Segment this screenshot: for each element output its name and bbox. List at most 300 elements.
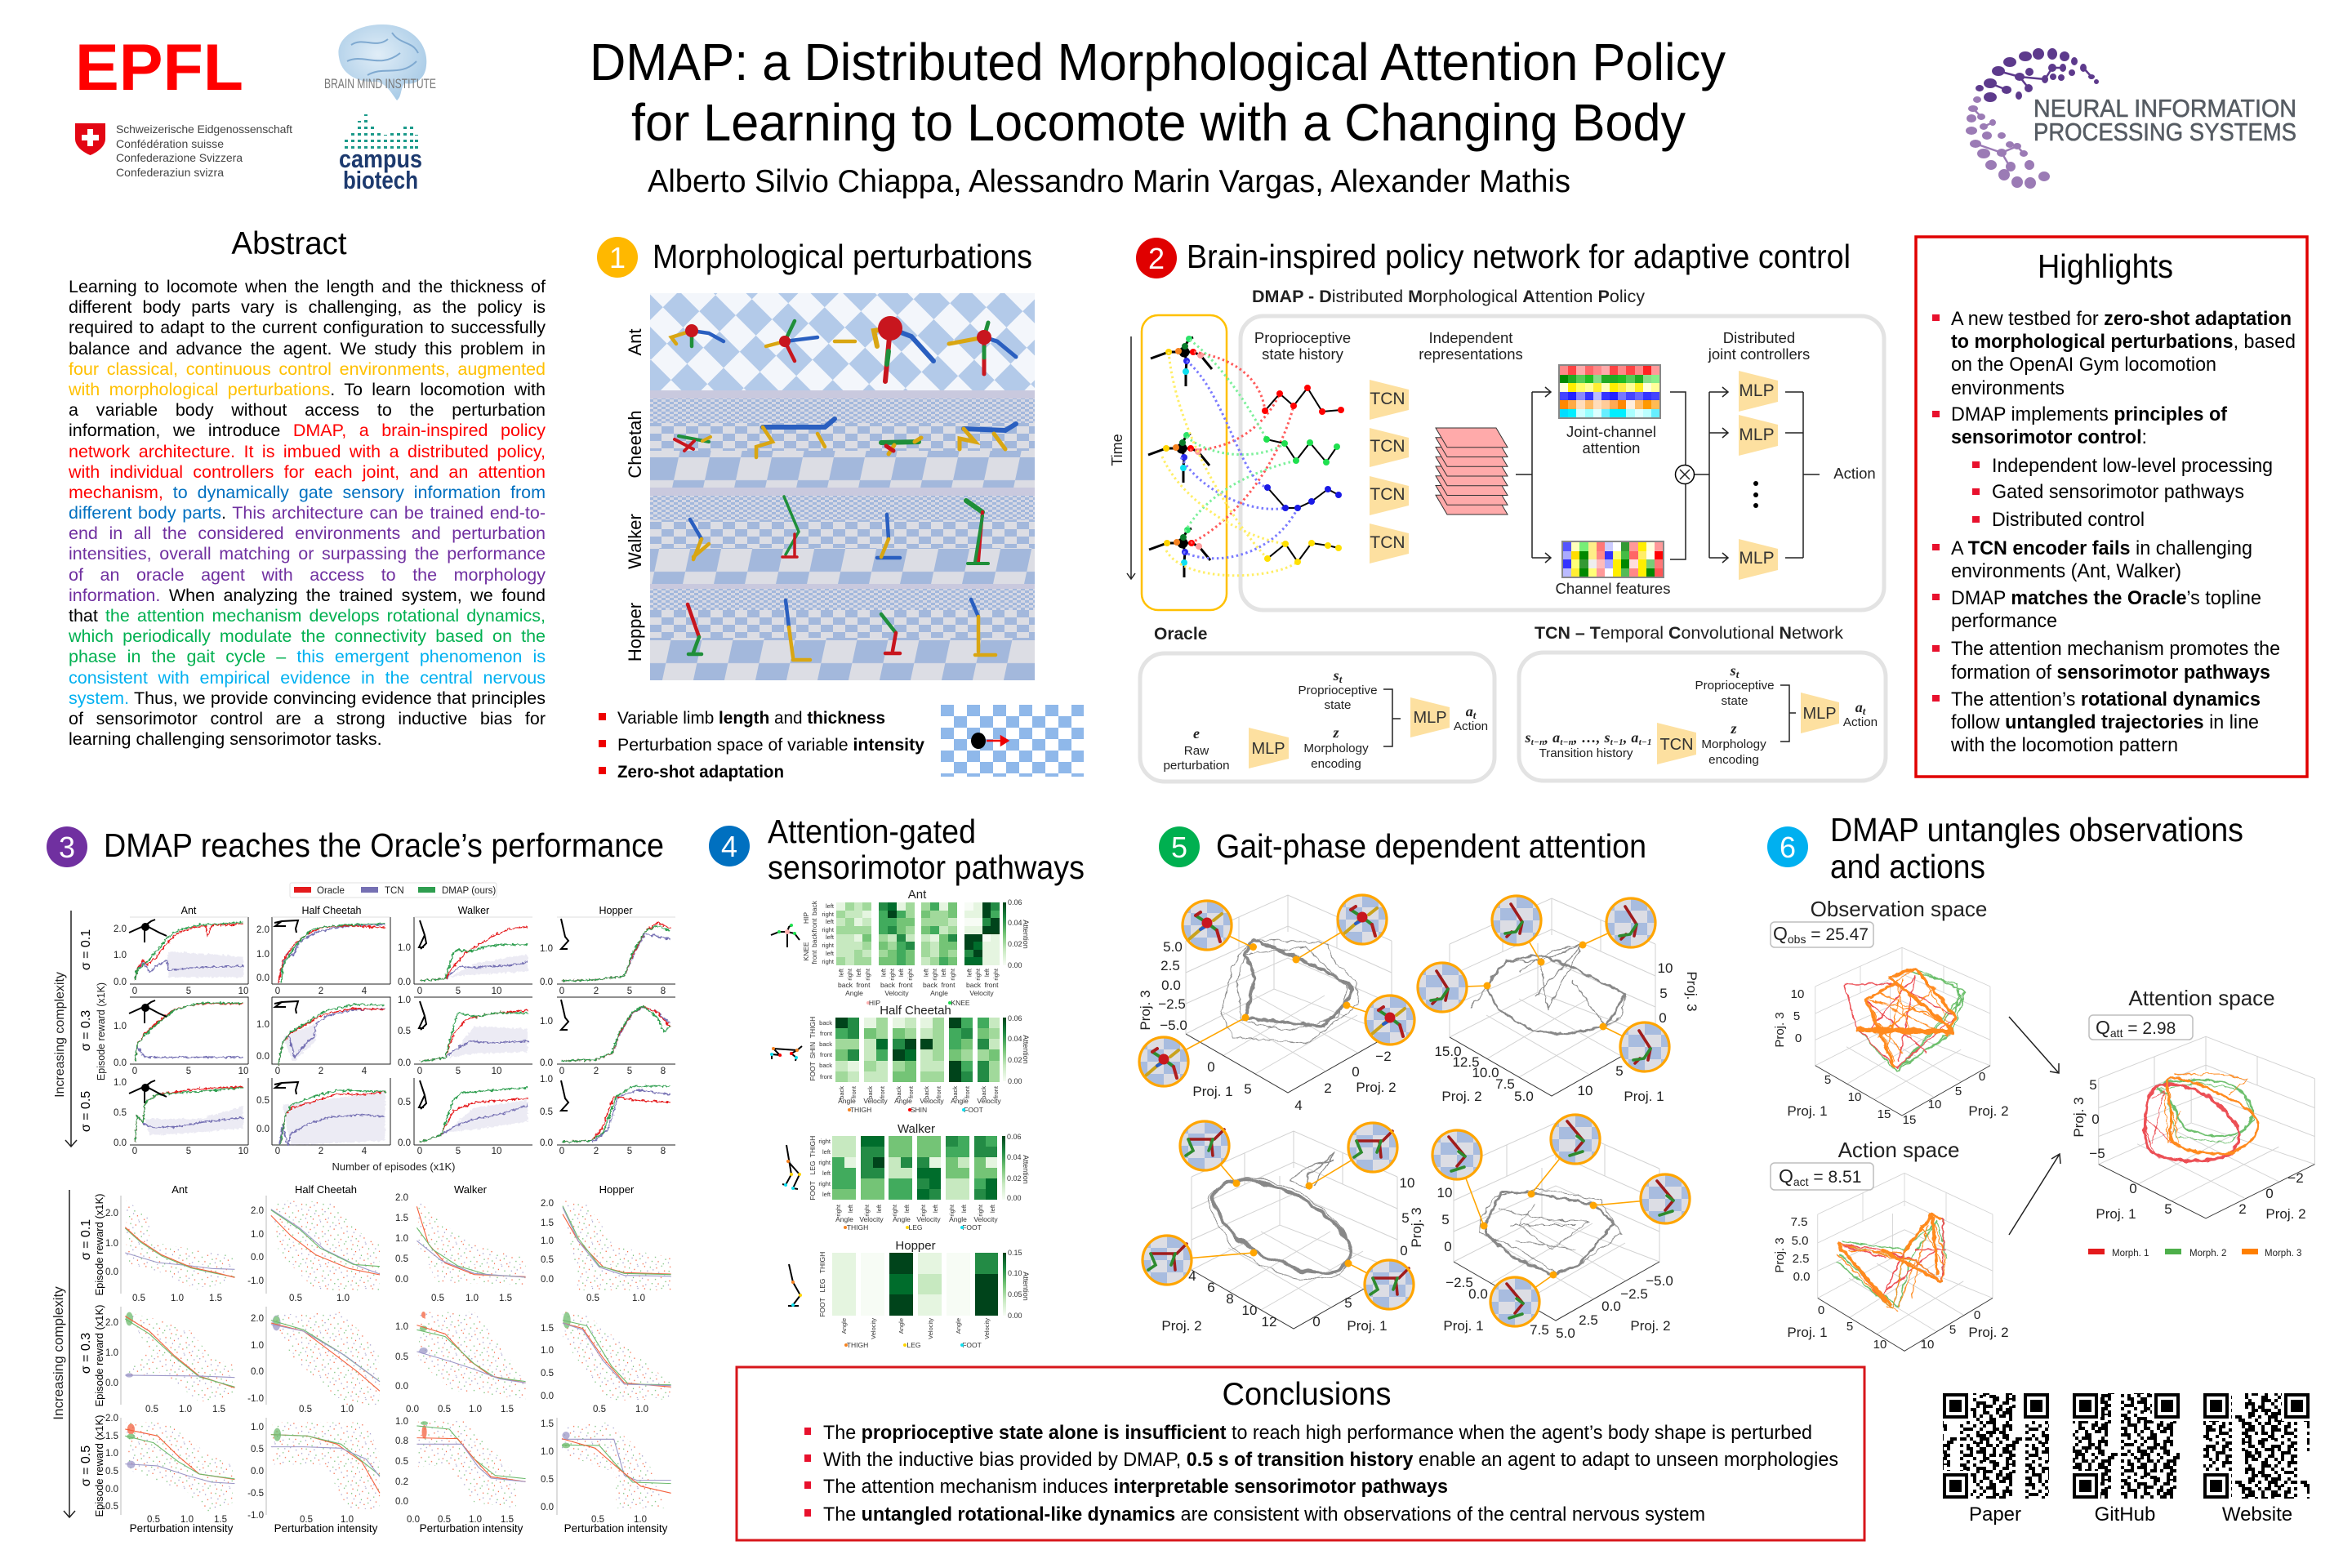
- x and y tick labels: 0: [275, 1067, 280, 1076]
- scatter tick labels: 0.5: [105, 1467, 118, 1477]
- MLP joint controllers: [1739, 371, 1778, 580]
- Oracle box: [1140, 653, 1494, 782]
- Q att callout: = 2.98: [2123, 1019, 2176, 1038]
- Oracle box: Action: [1454, 719, 1488, 733]
- environment titles: Half Cheetah: [302, 905, 362, 916]
- Oracle box: Raw: [1184, 744, 1209, 758]
- scatter tick labels: 0.5: [289, 1294, 302, 1303]
- panel: 5 gait-phase dependent attention: [1138, 826, 1699, 1341]
- x and y tick labels: 1.0: [540, 944, 553, 954]
- title: DMAP: a Distributed Morphological Attention Policy: [590, 33, 1726, 91]
- plot: hopper gait-phase trajectory: 10: [1437, 1185, 1452, 1200]
- Half Cheetah attention heatmap: SHIN: [808, 1042, 817, 1058]
- learning curves chart: [53, 905, 675, 1173]
- x and y tick labels: 5: [186, 1147, 191, 1156]
- Ant attention heatmap: Angle: [845, 989, 863, 997]
- x and y tick labels: 1.0: [114, 1078, 127, 1088]
- x and y tick labels: 2: [318, 1067, 323, 1076]
- logo: Campus Biotech: [339, 114, 422, 194]
- scatter sigma labels: [79, 1219, 93, 1486]
- Half Cheetah attention heatmap: back: [819, 1040, 832, 1048]
- action space plot: 5: [1846, 1320, 1853, 1334]
- Half Cheetah attention heatmap: SHIN: [911, 1106, 927, 1114]
- conclusions text: With the inductive bias provided by DMAP, 0.5 s of transition history enable an agent to adapt to unseen morphologies: [823, 1449, 1838, 1471]
- arrow: action to attention: [2009, 1154, 2060, 1235]
- plot: walker gait-phase trajectory: Proj. 3: [1684, 971, 1699, 1012]
- abstract text: which periodically modulate the connectivity based on the: [69, 626, 546, 646]
- plot: hopper gait-phase trajectory: 0.0: [1601, 1298, 1621, 1314]
- heading 2: Brain-inspired policy network for adaptive control: [1187, 238, 1851, 275]
- heading 3: DMAP reaches the Oracle’s performance: [104, 826, 664, 864]
- scatter tick labels: 2.0: [251, 1314, 264, 1324]
- morph legend: Morph. 3: [2265, 1249, 2301, 1258]
- Walker attention heatmap: Angle: [835, 1215, 853, 1223]
- TCN box: TCN: [1659, 736, 1694, 754]
- scatter tick labels: 0.0: [395, 1382, 408, 1392]
- conclusions bullets: [804, 1428, 811, 1517]
- x and y tick labels: 2.0: [256, 925, 270, 935]
- logo: Swiss Confederation: Confederaziun svizra: [116, 166, 224, 179]
- Hopper attention heatmap: 0.15: [1008, 1249, 1022, 1257]
- x and y tick labels: 0.0: [114, 1138, 127, 1148]
- highlights text: Distributed control: [1992, 509, 2145, 531]
- Walker attention heatmap: 0.00: [1007, 1194, 1022, 1202]
- Half Cheetah attention heatmap: FOOT: [808, 1062, 817, 1081]
- attention space plot: Attention space: [2128, 986, 2275, 1010]
- scatter tick labels: 2.0: [105, 1318, 118, 1328]
- plot: ant gait-phase trajectory: [1138, 895, 1414, 1113]
- badge 1: 1: [609, 241, 626, 274]
- abstract text: phase in the gait cycle – this emergent phenomenon is: [69, 647, 546, 666]
- logo: Swiss Confederation: Schweizerische Eidgenossenschaft: [116, 122, 292, 136]
- Q act callout: = 8.51: [1809, 1168, 1861, 1187]
- Hopper attention heatmap: Attention: [1022, 1272, 1030, 1301]
- x-axis label: Number of episodes (x1K): [332, 1160, 456, 1173]
- observation space plot: [1773, 897, 2009, 1127]
- arrow: observation to attention: [2009, 1017, 2059, 1073]
- scatter tick labels: 0.0: [395, 1497, 408, 1507]
- scatter x-axis labels: Perturbation intensity: [564, 1522, 668, 1535]
- attention space plot: −5: [2089, 1146, 2105, 1161]
- logo: Swiss Confederation: Confédération suisse: [116, 137, 224, 150]
- row labels: Walker: [625, 514, 645, 569]
- highlights text: to morphological perturbations, based: [1951, 331, 2296, 353]
- x and y tick labels: 10: [238, 987, 248, 996]
- action space plot: 0: [1818, 1303, 1824, 1317]
- x and y tick labels: 0.5: [398, 1098, 411, 1107]
- TCN blocks: TCN: [1370, 533, 1405, 552]
- Ant attention heatmap: [771, 888, 1030, 1007]
- x and y tick labels: 5: [627, 1147, 632, 1156]
- x and y tick labels: 0.0: [398, 978, 411, 987]
- scatter tick labels: 0.0: [407, 1515, 420, 1525]
- x and y tick labels: 0.0: [114, 1058, 127, 1068]
- Ant attention heatmap: Velocity: [969, 989, 994, 997]
- Half Cheetah attention heatmap: FOOT: [964, 1106, 983, 1114]
- plot: cheetah gait-phase trajectory: 10: [1400, 1175, 1414, 1191]
- Ant attention heatmap: 0.00: [1008, 961, 1022, 969]
- x and y tick labels: 10: [492, 1067, 501, 1076]
- icon: perturbation checkerboard: [941, 705, 1084, 777]
- x and y tick labels: 0.0: [398, 1138, 411, 1148]
- x and y tick labels: 0: [417, 1067, 422, 1076]
- x and y tick labels: 10: [238, 1067, 248, 1076]
- plot: cheetah gait-phase trajectory: 5: [1401, 1210, 1410, 1226]
- abstract text: network architecture. It is imbued with a distributed policy,: [69, 441, 546, 461]
- scatter tick labels: 0.5: [395, 1352, 408, 1362]
- Walker attention heatmap: 0.02: [1007, 1174, 1022, 1183]
- heading 1: Morphological perturbations: [653, 238, 1032, 275]
- scatter environment titles: [172, 1183, 635, 1196]
- scatter tick labels: 0.5: [541, 1369, 554, 1379]
- scatter tick labels: 1.5: [501, 1405, 514, 1414]
- action space plot: Proj. 1: [1787, 1325, 1828, 1340]
- scatter y-axis labels: [93, 1194, 105, 1517]
- abstract text: of sensorimotor control are a strong inductive bias for: [69, 709, 546, 728]
- Walker attention heatmap: Velocity: [916, 1215, 941, 1223]
- Hopper attention heatmap: FOOT: [818, 1298, 826, 1317]
- action space plot: Proj. 2: [1968, 1325, 2009, 1340]
- plot: hopper gait-phase trajectory: Proj. 1: [1443, 1318, 1484, 1334]
- Oracle box: e: [1193, 725, 1200, 742]
- plot: hopper gait-phase trajectory: 0.0: [1468, 1286, 1488, 1302]
- TCN box: Transition history: [1539, 746, 1633, 760]
- plot: hopper gait-phase trajectory: 7.5: [1530, 1322, 1549, 1338]
- plot: hopper gait-phase trajectory: −2.5: [1620, 1286, 1648, 1302]
- TCN box: MLP: [1802, 705, 1837, 723]
- Walker attention heatmap: LEG: [808, 1160, 817, 1175]
- scatter tick labels: 0.5: [251, 1445, 264, 1454]
- plot: walker gait-phase trajectory: 15.0: [1434, 1044, 1462, 1059]
- Ant attention heatmap: Ant: [908, 888, 927, 902]
- scatter tick labels: 1.5: [541, 1324, 554, 1334]
- x and y tick labels: 4: [362, 987, 368, 996]
- attention space plot: Proj. 2: [2265, 1206, 2306, 1222]
- abstract text: information, we introduce DMAP, a brain-inspired policy: [69, 421, 546, 440]
- Ant attention heatmap: right: [822, 926, 835, 933]
- column labels: Proprioceptive: [1254, 329, 1351, 346]
- abstract text: with morphological perturbations. To learn locomotion with: [69, 380, 546, 399]
- x and y tick labels: 0.0: [256, 1125, 270, 1134]
- environment titles: Hopper: [599, 905, 632, 916]
- x and y tick labels: 1.0: [256, 950, 270, 960]
- y-axis label: Episode reward (x1K): [96, 982, 107, 1080]
- scatter tick labels: 0.0: [541, 1392, 554, 1401]
- scatter y-axis labels: Episode reward (x1K): [93, 1414, 105, 1517]
- scatter tick labels: 0.2: [395, 1477, 408, 1487]
- Walker attention heatmap: right: [818, 1138, 831, 1145]
- Ant attention heatmap: left: [826, 933, 835, 941]
- increasing complexity arrow: Increasing complexity: [53, 972, 67, 1098]
- observation space plot: 10: [1848, 1090, 1861, 1104]
- plot: ant gait-phase trajectory: Proj. 2: [1356, 1080, 1396, 1095]
- panel: 4 attention-gated sensorimotor pathways: [709, 813, 1085, 1349]
- TCN box: s: [1731, 662, 1736, 679]
- scatter tick labels: 0.0: [105, 1485, 118, 1494]
- x and y tick labels: 0.0: [256, 1052, 270, 1062]
- logo: Brain Mind Institute: BRAIN MIND INSTITUTE: [324, 76, 436, 91]
- Ant attention heatmap: Velocity: [884, 989, 909, 997]
- Oracle box: MLP: [1251, 740, 1285, 758]
- scatter environment titles: Walker: [454, 1183, 488, 1196]
- plot: ant gait-phase trajectory: 0: [1352, 1064, 1360, 1080]
- TCN box: Morphology: [1701, 737, 1766, 751]
- scatter tick labels: 0.5: [438, 1515, 451, 1525]
- scatter tick labels: 0.8: [395, 1437, 408, 1446]
- Half Cheetah attention heatmap: 0.04: [1008, 1035, 1022, 1043]
- scatter x-axis labels: Perturbation intensity: [420, 1522, 523, 1535]
- TCN box: , a: [1544, 729, 1560, 746]
- x and y tick labels: 5: [186, 987, 191, 996]
- TCN box: t−1: [1639, 737, 1651, 747]
- logo: EPFL: EPFL: [75, 31, 243, 105]
- panel: highlights: [1916, 237, 2307, 777]
- plot: hopper gait-phase trajectory: −2.5: [1446, 1275, 1473, 1290]
- x and y tick labels: 0: [275, 1147, 280, 1156]
- Hopper attention heatmap: 0.00: [1008, 1312, 1022, 1320]
- plot: ant gait-phase trajectory: 4: [1294, 1098, 1303, 1113]
- scatter tick labels: 0.5: [395, 1254, 408, 1264]
- TCN box: Proprioceptive: [1695, 679, 1775, 693]
- x and y tick labels: 10: [238, 1147, 248, 1156]
- scatter tick labels: 1.5: [212, 1405, 225, 1414]
- plot: cheetah gait-phase trajectory: Proj. 2: [1161, 1318, 1202, 1334]
- highlights text: The attention’s rotational dynamics: [1951, 688, 2261, 710]
- highlights text: A TCN encoder fails in challenging: [1951, 537, 2252, 559]
- plot: cheetah gait-phase trajectory: 5: [1344, 1295, 1352, 1311]
- scatter tick labels: -1.0: [247, 1511, 264, 1521]
- abstract text: system. Thus, we provide convincing evidence that principles: [69, 688, 546, 708]
- joint-channel attention heatmap: attention: [1583, 439, 1640, 457]
- x and y tick labels: 1.0: [398, 996, 411, 1005]
- action space plot: 5: [1949, 1323, 1956, 1337]
- x and y tick labels: 0.0: [398, 1058, 411, 1068]
- abstract text: that the attention mechanism develops rotational dynamics,: [69, 606, 546, 626]
- x and y tick labels: 0: [559, 1147, 564, 1156]
- plot: hopper gait-phase trajectory: 5.0: [1556, 1325, 1575, 1341]
- plot: cheetah gait-phase trajectory: 12: [1262, 1314, 1276, 1330]
- learning-curve legend: Oracle: [317, 886, 345, 896]
- scatter tick labels: 0.5: [541, 1475, 554, 1485]
- TCN blocks: TCN: [1370, 437, 1405, 456]
- TCN box: z: [1730, 720, 1737, 737]
- scatter tick labels: 1.0: [395, 1234, 408, 1244]
- connectors: [1516, 387, 1820, 563]
- QR code: GitHub: GitHub: [2095, 1503, 2155, 1526]
- sigma labels: σ = 0.1: [79, 929, 93, 970]
- conclusions text: The proprioceptive state alone is insufficient to reach high performance when the agent’s body shape is perturbed: [823, 1422, 1812, 1444]
- channel features heatmap: [1556, 541, 1670, 597]
- Half Cheetah attention heatmap: back: [819, 1062, 832, 1069]
- scatter tick labels: 0.0: [105, 1379, 118, 1388]
- channel features heatmap: Channel features: [1556, 580, 1670, 597]
- Ant attention heatmap: 0.04: [1008, 919, 1022, 927]
- Ant attention heatmap: back: [810, 932, 818, 947]
- observation space plot: Proj. 3: [1773, 1012, 1787, 1048]
- conclusions text: The untangled rotational-like dynamics are consistent with observations of the central nervous system: [823, 1503, 1705, 1526]
- Hopper attention heatmap: LEG: [818, 1278, 826, 1293]
- Hopper attention heatmap: Velocity: [927, 1318, 934, 1339]
- plot: hopper gait-phase trajectory: 2.5: [1579, 1312, 1598, 1328]
- plot: hopper gait-phase trajectory: [1432, 1115, 1690, 1341]
- highlights text: sensorimotor control:: [1951, 426, 2147, 448]
- scatter tick labels: -1.0: [247, 1394, 264, 1404]
- TCN box: [1519, 653, 1886, 781]
- badge 5: [1159, 826, 1200, 867]
- heading 4: Attention-gated: [768, 813, 976, 850]
- panel: conclusions: [737, 1367, 1864, 1540]
- learning-curve legend: DMAP (ours): [442, 886, 496, 896]
- plot: ant gait-phase trajectory: 5.0: [1163, 939, 1183, 955]
- scatter tick labels: 1.0: [469, 1405, 482, 1414]
- Q att callout: att: [2110, 1027, 2123, 1040]
- Ant attention heatmap: front: [810, 918, 818, 933]
- highlights text: DMAP matches the Oracle’s topline: [1951, 587, 2261, 609]
- bullet list: Zero-shot adaptation: [617, 763, 784, 782]
- scatter tick labels: 1.0: [541, 1346, 554, 1356]
- Q act callout: act: [1793, 1175, 1809, 1188]
- time arrow: [1109, 336, 1135, 579]
- scatter sigma labels: σ = 0.3: [79, 1333, 93, 1374]
- plot: cheetah gait-phase trajectory: Proj. 3: [1409, 1207, 1424, 1248]
- x and y tick labels: 0.5: [256, 1096, 270, 1106]
- scatter tick labels: 0.0: [251, 1467, 264, 1477]
- Half Cheetah attention heatmap: back: [819, 1019, 832, 1027]
- highlights text: DMAP implements principles of: [1951, 403, 2228, 425]
- scatter tick labels: 0.5: [299, 1405, 312, 1414]
- scatter tick labels: -0.5: [247, 1489, 264, 1499]
- environment titles: Walker: [458, 905, 489, 916]
- x and y tick labels: 0: [132, 1147, 137, 1156]
- Q att callout: Q: [2096, 1017, 2110, 1038]
- plot: walker gait-phase trajectory: Proj. 2: [1441, 1089, 1482, 1104]
- x and y tick labels: 0: [417, 987, 422, 996]
- scatter tick labels: 0.0: [406, 1405, 419, 1414]
- plot: cheetah gait-phase trajectory: [1143, 1121, 1424, 1334]
- title: [590, 33, 1726, 152]
- scatter tick labels: 0.5: [147, 1515, 160, 1525]
- scatter environment titles: Half Cheetah: [295, 1183, 357, 1196]
- highlights text: Gated sensorimotor pathways: [1992, 481, 2244, 503]
- observation space plot: 5: [1824, 1073, 1831, 1087]
- plot: ant gait-phase trajectory: −2.5: [1158, 996, 1186, 1012]
- logo: NeurIPS: PROCESSING SYSTEMS: [2034, 118, 2296, 146]
- x and y tick labels: 10: [492, 987, 501, 996]
- abstract text: different body parts. This architecture can be trained end-to-: [69, 503, 546, 523]
- Q obs callout: = 25.47: [1806, 925, 1869, 944]
- Half Cheetah attention heatmap: Attention: [1022, 1035, 1030, 1064]
- column labels: state history: [1262, 345, 1344, 363]
- Walker attention heatmap: left: [822, 1148, 831, 1156]
- morph legend: Morph. 1: [2112, 1249, 2149, 1258]
- DMAP architecture box: [1241, 316, 1884, 610]
- plot: cheetah gait-phase trajectory: 0: [1400, 1243, 1408, 1258]
- scatter tick labels: 0.0: [541, 1503, 554, 1512]
- scatter tick labels: 2.0: [105, 1414, 118, 1423]
- Walker attention heatmap: left: [822, 1169, 831, 1177]
- abstract text: four classical, continuous control environments, augmented: [69, 359, 546, 379]
- scatter tick labels: 0.0: [251, 1367, 264, 1377]
- badge 3: 3: [59, 831, 75, 864]
- scatter tick labels: 2.0: [251, 1206, 264, 1216]
- TCN box: state: [1722, 694, 1748, 708]
- TCN blocks: TCN: [1370, 390, 1405, 408]
- Half Cheetah attention heatmap: front: [820, 1051, 833, 1058]
- conclusions text: [823, 1422, 1838, 1526]
- plot: hopper gait-phase trajectory: −5.0: [1646, 1273, 1673, 1289]
- Half Cheetah attention heatmap: Half Cheetah: [880, 1004, 951, 1018]
- Hopper attention heatmap: Angle: [955, 1318, 962, 1334]
- highlights text: on the OpenAI Gym locomotion: [1951, 354, 2216, 376]
- plot: ant gait-phase trajectory: 5: [1244, 1081, 1252, 1097]
- Hopper attention heatmap: [788, 1239, 1030, 1349]
- Walker attention heatmap: left: [822, 1191, 831, 1198]
- x and y tick labels: 4: [362, 1147, 368, 1156]
- attention space plot: 5: [2164, 1201, 2172, 1217]
- highlights text: formation of sensorimotor pathways: [1951, 662, 2270, 684]
- conclusions heading: Conclusions: [1222, 1377, 1392, 1412]
- MLP joint controllers: MLP: [1739, 381, 1775, 400]
- TCN box: t−n: [1531, 737, 1544, 747]
- abstract text: learning challenging sensorimotor tasks.: [69, 729, 382, 749]
- Q obs callout: Q: [1773, 923, 1788, 944]
- scatter environment titles: Ant: [172, 1183, 188, 1196]
- highlights text: environments (Ant, Walker): [1951, 560, 2181, 582]
- observation space plot: 5: [1955, 1085, 1962, 1098]
- plot: ant gait-phase trajectory: 2.5: [1160, 958, 1180, 973]
- Walker attention heatmap: Velocity: [973, 1215, 998, 1223]
- morph legend: [2088, 1249, 2301, 1258]
- Q att callout: [2089, 1015, 2193, 1040]
- attention space plot: [2071, 986, 2314, 1222]
- simulation render grid: [650, 293, 1035, 680]
- highlights text: A new testbed for zero-shot adaptation: [1951, 308, 2292, 330]
- abstract text: [69, 277, 550, 759]
- QR code: Paper: Paper: [1969, 1503, 2021, 1526]
- plot: ant gait-phase trajectory: 0: [1207, 1059, 1215, 1075]
- action space plot: [1773, 1138, 2009, 1352]
- Oracle box: t: [1339, 673, 1343, 685]
- observation space plot: 0: [1979, 1070, 1985, 1084]
- scatter tick labels: 1.0: [180, 1515, 194, 1525]
- plot: ant gait-phase trajectory: 2: [1324, 1080, 1332, 1096]
- abstract text: of an oracle agent with access to the morphology: [69, 565, 546, 585]
- Ant attention heatmap: Attention: [1022, 920, 1030, 949]
- scatter tick labels: 1.0: [105, 1348, 118, 1358]
- x and y tick labels: [114, 924, 666, 1156]
- chart lines and bands: [136, 922, 670, 1145]
- scatter tick labels: 1.0: [105, 1449, 118, 1459]
- bullet list: [599, 709, 924, 782]
- multiply node: [1676, 466, 1694, 483]
- plot: walker gait-phase trajectory: [1418, 896, 1699, 1104]
- plot: walker gait-phase trajectory: 10: [1658, 960, 1673, 976]
- panel: 6 DMAP untangles observations and actions: [1767, 811, 2314, 1352]
- Half Cheetah attention heatmap: THIGH: [850, 1106, 871, 1114]
- row labels: Ant: [625, 328, 645, 356]
- Ant attention heatmap: right: [822, 958, 835, 965]
- scatter tick labels: 0.5: [591, 1515, 604, 1525]
- plot: cheetah gait-phase trajectory: 0: [1312, 1314, 1321, 1330]
- badge 1: [597, 237, 638, 278]
- Half Cheetah attention heatmap: Angle: [894, 1097, 912, 1105]
- TCN box: s: [1526, 729, 1531, 746]
- scatter tick labels: 0.0: [541, 1275, 554, 1285]
- x and y tick labels: 1.0: [398, 943, 411, 953]
- Ant attention heatmap: HIP: [802, 912, 810, 924]
- Q obs callout: [1771, 922, 1873, 947]
- scatter y-axis labels: Episode reward (x1K): [93, 1305, 105, 1406]
